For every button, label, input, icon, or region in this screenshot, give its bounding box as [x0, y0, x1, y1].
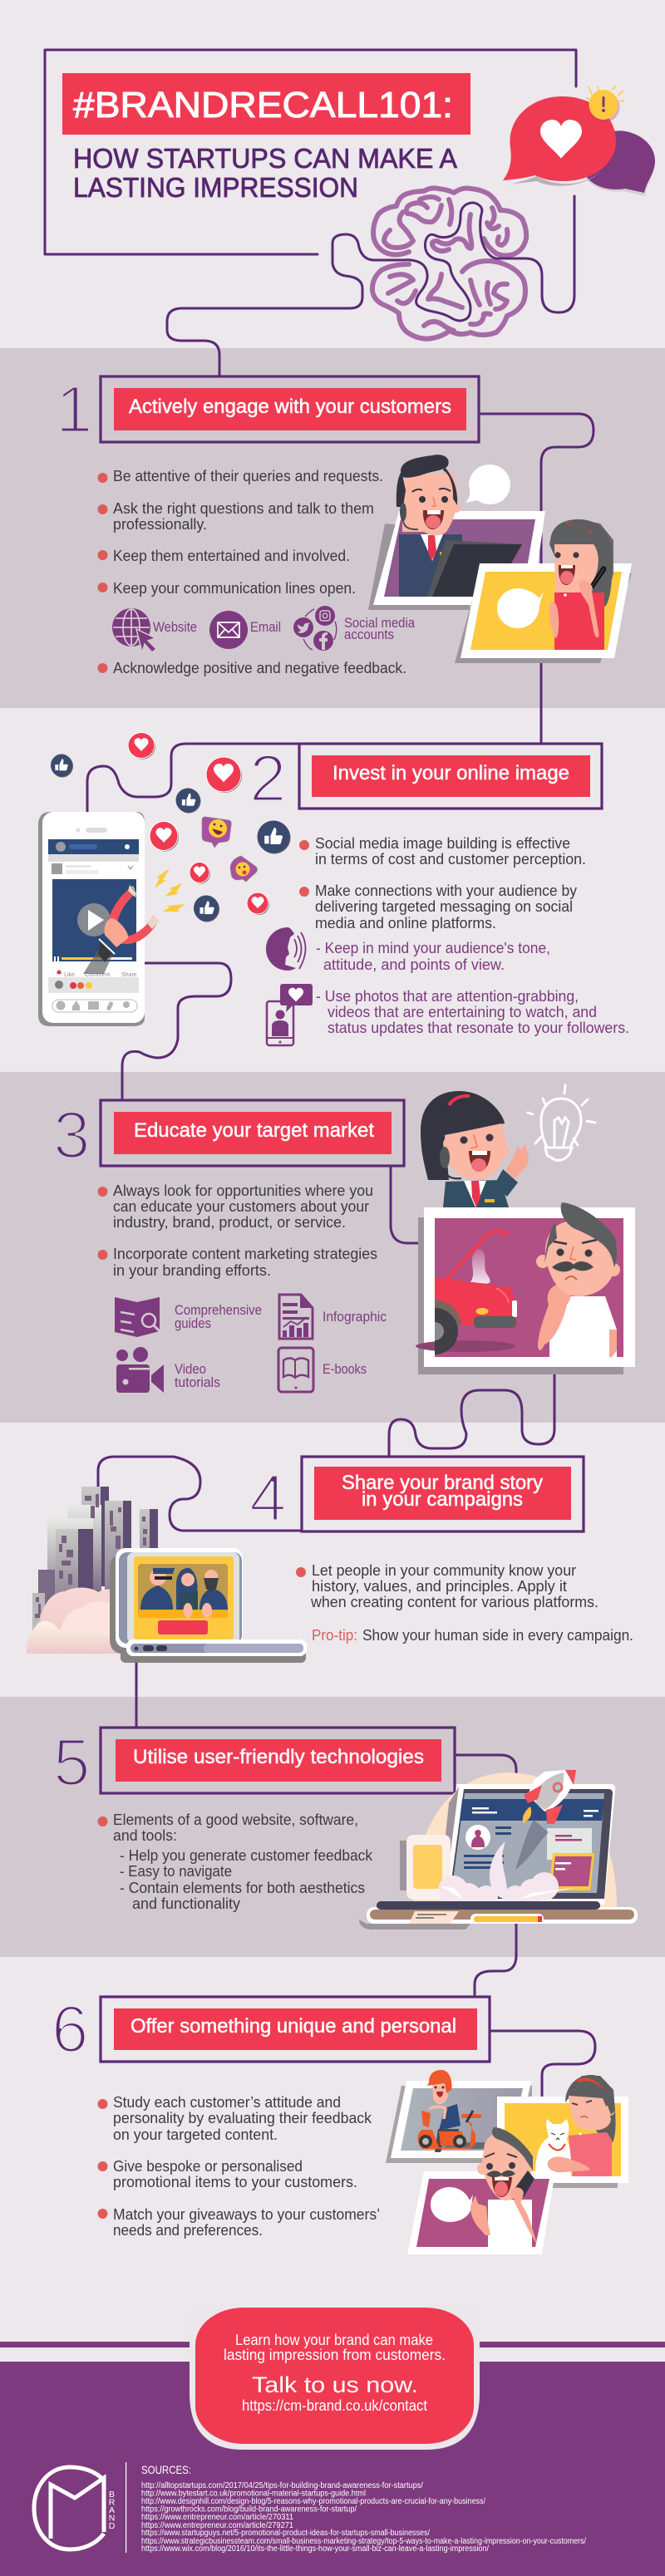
text block: step 6 bullets: personality by evaluating their feedback: [113, 2109, 372, 2126]
illustration: man on phone with speech bubble: [407, 2127, 555, 2254]
subtitle: HOW STARTUPS CAN MAKE A: [73, 143, 457, 174]
illustration: laptop with rocket launch: [359, 1770, 638, 1930]
icon: comprehensive guides: guides: [175, 1316, 211, 1331]
text block: sources: https://www.entrepreneur.com/article/270311: [141, 2513, 293, 2522]
icon: e-book tablet: [278, 1348, 367, 1392]
icon: video camera: tutorials: [175, 1375, 220, 1390]
logo: CM Brand: R: [109, 2498, 116, 2508]
text block: photos and videos tip: status updates that resonate to your followers.: [328, 1019, 629, 1036]
icon: video camera: Video: [175, 1362, 206, 1377]
panel: step 3: [53, 1085, 635, 1393]
logo: CM Brand: B: [109, 2490, 115, 2500]
text block: step 5 bullets: - Contain elements for both aesthetics: [120, 1879, 365, 1896]
step number 3: 3: [53, 1098, 90, 1172]
icon: infographic document: [279, 1295, 387, 1339]
icon: social media: [293, 606, 416, 651]
text block: step 6 bullets: [98, 2093, 380, 2239]
text block: audience tone tip: - Keep in mind your audience's tone,: [316, 939, 550, 956]
text block: step 5 bullets: [98, 1811, 373, 1912]
illustration: smartphone with video post: Comment: [85, 972, 110, 978]
illustration: call centre agent: [368, 455, 545, 610]
logo: CM Brand: D: [109, 2521, 116, 2531]
text block: step 4 story: [296, 1561, 598, 1610]
panel: title area: [62, 73, 655, 203]
step number 6: 6: [52, 1992, 88, 2066]
illustration: presenter woman with light bulb: [421, 1085, 595, 1207]
text block: step 2 bullets: delivering targeted messaging on social: [315, 897, 573, 915]
text block: step 2 bullets: Social media image building is effective: [315, 834, 570, 852]
illustration: man with broken-down car: [416, 1202, 635, 1374]
step number 5: 5: [53, 1725, 90, 1799]
step number 1: 1: [56, 372, 93, 446]
text block: step 1 bullets: [98, 467, 406, 676]
text block: step 6 bullets: Match your giveaways to your customers’: [113, 2205, 380, 2223]
logo: CM Brand: A: [109, 2505, 115, 2515]
icon: floating likes and hearts: [51, 733, 291, 922]
title banner: [62, 73, 470, 135]
text block: sources: http://www.bytestart.co.uk/promotional-material-startups-guide.html: [141, 2490, 366, 2498]
text block: step 6 bullets: Give bespoke or personalised: [113, 2157, 303, 2175]
panel: step 1: [56, 372, 632, 676]
step number 2: 2: [249, 741, 286, 815]
text block: step 3 bullets: can educate your customers about your: [113, 1197, 369, 1215]
title banner: #BRANDRECALL101:: [73, 85, 453, 125]
logo: CM Brand: [34, 2467, 116, 2549]
text block: step 6 bullets: needs and preferences.: [113, 2221, 263, 2239]
text block: photos and videos tip: [316, 987, 629, 1036]
subtitle: LASTING IMPRESSION: [73, 172, 358, 203]
call to action text: lasting impression from customers.: [224, 2347, 446, 2363]
panel: step 5: [53, 1725, 638, 1930]
heading: step 4: Share your brand story: [342, 1472, 544, 1494]
text block: step 5 bullets: and tools:: [113, 1826, 177, 1844]
heading: step 1: [101, 376, 479, 442]
heading: step 5: Utilise user-friendly technologies: [133, 1746, 424, 1768]
text block: step 3 bullets: [98, 1182, 377, 1279]
text block: sources: https://www.entrepreneur.com/article/279271: [141, 2521, 293, 2530]
heading: step 4: in your campaigns: [362, 1488, 523, 1511]
text block: step 6 bullets: Study each customer’s attitude and: [113, 2093, 341, 2111]
text block: step 3 bullets: Incorporate content marketing strategies: [113, 1245, 377, 1262]
call to action text: [224, 2332, 446, 2414]
illustration: smartphone with video post: Share: [121, 972, 137, 978]
panel: footer: [34, 2462, 586, 2554]
illustration: woman with cat: [497, 2075, 628, 2188]
icon: infographic document: Infographic: [323, 1310, 387, 1325]
heading: step 2: Invest in your online image: [332, 762, 569, 784]
band: step 5 background: [0, 1697, 665, 1957]
text block: step 1 bullets: Be attentive of their queries and requests.: [113, 467, 383, 484]
text block: step 4 story: when creating content for various platforms.: [310, 1593, 598, 1610]
text block: step 2 bullets: media and online platforms.: [315, 914, 496, 932]
band: step 3 background: [0, 1072, 665, 1423]
text block: photos and videos tip: - Use photos that are attention-grabbing,: [316, 987, 579, 1005]
icon: comprehensive guides: Comprehensive: [175, 1303, 262, 1318]
illustration: smartphone with video post: Like: [64, 972, 75, 978]
text block: photos and videos tip: videos that are entertaining to watch, and: [328, 1003, 597, 1020]
icon: email: Email: [250, 620, 281, 635]
text block: step 2 bullets: in terms of cost and customer perception.: [315, 850, 586, 868]
illustration: laptop with team video: [110, 1548, 307, 1663]
icon: e-book tablet: E-books: [323, 1362, 367, 1377]
text block: sources: SOURCES:: [141, 2463, 191, 2476]
illustration: delivery rider on scooter: [386, 2070, 532, 2163]
text block: step 1 bullets: professionally.: [113, 515, 207, 533]
text block: step 5 bullets: - Help you generate customer feedback: [120, 1846, 373, 1864]
text block: sources: http://www.designhill.com/design-blog/5-reasons-why-promotional-products-are-crucial-for-any-business/: [141, 2497, 485, 2506]
text block: sources: https://www.wix.com/blog/2016/10/its-the-little-things-how-your-small-biz-can-leave-a-lasting-impression/: [141, 2544, 489, 2554]
text block: step 6 bullets: on your targeted content.: [113, 2126, 278, 2143]
text block: pro-tip: Show your human side in every campaign.: [362, 1626, 633, 1644]
call to action text: https://cm-brand.co.uk/contact: [242, 2397, 427, 2414]
call to action backing: [190, 2308, 480, 2450]
band: footer background: [0, 2362, 665, 2576]
text block: step 3 bullets: Always look for opportunities where you: [113, 1182, 373, 1199]
panel: step 6: [52, 1992, 628, 2254]
call to action pill: [195, 2308, 474, 2444]
heading: step 6: Offer something unique and personal: [131, 2015, 456, 2038]
icon: comprehensive guides: [115, 1297, 262, 1337]
icon: website globe: [112, 608, 197, 652]
connectors: journey line linking all steps: [45, 50, 595, 2102]
text block: step 1 bullets: Keep your communication lines open.: [113, 579, 356, 597]
text block: step 3 bullets: in your branding efforts.: [113, 1261, 271, 1279]
text block: step 5 bullets: and functionality: [132, 1895, 241, 1912]
text block: sources: http://alltopstartups.com/2017/04/25/tips-for-building-brand-awareness-for-startups/: [141, 2481, 423, 2490]
icon: social media: Social media: [344, 616, 416, 631]
text block: step 2 bullets: [299, 834, 586, 932]
icon: speaking head: [266, 927, 306, 971]
heading: step 3: [101, 1100, 404, 1166]
call to action text: Learn how your brand can make: [235, 2332, 433, 2348]
step number 4: 4: [249, 1461, 286, 1535]
text block: step 5 bullets: Elements of a good website, software,: [113, 1811, 358, 1828]
text block: step 1 bullets: Keep them entertained and involved.: [113, 547, 350, 564]
text block: sources: [141, 2463, 586, 2554]
text block: step 5 bullets: - Easy to navigate: [120, 1862, 232, 1880]
illustration: smartphone with video post: [38, 812, 160, 1026]
subtitle: [73, 143, 457, 203]
icon: phone with heart message: [267, 984, 313, 1045]
icon: social media: accounts: [344, 627, 394, 642]
brain illustration: [372, 188, 526, 339]
text block: step 4 story: history, values, and principles. Apply it: [312, 1577, 567, 1595]
icon: video camera: [116, 1347, 220, 1393]
illustration: city skyline: [27, 1487, 158, 1654]
panel: call to action: [190, 2308, 480, 2450]
icon: emoji reaction bubbles: [202, 817, 258, 882]
heading: step 4: [302, 1457, 584, 1531]
text block: sources: https://growthrocks.com/blog/build-brand-awareness-for-startup/: [141, 2505, 357, 2515]
text block: pro-tip: Pro-tip:: [312, 1626, 357, 1644]
illustration: woman on phone: [455, 519, 632, 663]
text block: audience tone tip: attitude, and points of view.: [323, 956, 505, 973]
icon: lightning bolts: [155, 868, 185, 912]
panel: step 4: [27, 1457, 633, 1663]
heading: step 2: [299, 744, 602, 809]
icon: email: [209, 611, 281, 649]
logo: CM Brand: N: [109, 2513, 115, 2523]
band: thin footer stripe: [0, 2342, 665, 2347]
heading: step 5: [101, 1728, 455, 1793]
heading: step 6: [101, 1997, 490, 2062]
text block: step 6 bullets: promotional items to your customers.: [113, 2173, 357, 2190]
icon: speech bubbles with heart and alert: [503, 86, 655, 196]
text block: step 4 story: Let people in your community know your: [312, 1561, 576, 1579]
heading: step 3: Educate your target market: [134, 1119, 374, 1142]
text block: step 1 bullets: Ask the right questions and talk to them: [113, 499, 374, 517]
panel: step 2: [38, 733, 629, 1045]
icon: website globe: Website: [153, 620, 197, 635]
call to action text: Talk to us now.: [252, 2372, 418, 2397]
text block: step 2 bullets: Make connections with your audience by: [315, 882, 578, 899]
text block: step 1 bullets: Acknowledge positive and negative feedback.: [113, 659, 406, 676]
band: step 1 background: [0, 348, 665, 708]
text block: step 3 bullets: industry, brand, product, or service.: [113, 1213, 346, 1231]
text block: audience tone tip: [316, 939, 550, 973]
text block: sources: https://www.strategicbusinessteam.com/small-business-marketing-strategy/top-5-ways-to-make-a-lasting-impression-on-your-customers/: [141, 2537, 586, 2546]
text block: sources: https://www.startupguys.net/5-promotional-product-ideas-for-startups-small-businesses/: [141, 2529, 430, 2538]
heading: step 1: Actively engage with your customers: [129, 396, 451, 418]
